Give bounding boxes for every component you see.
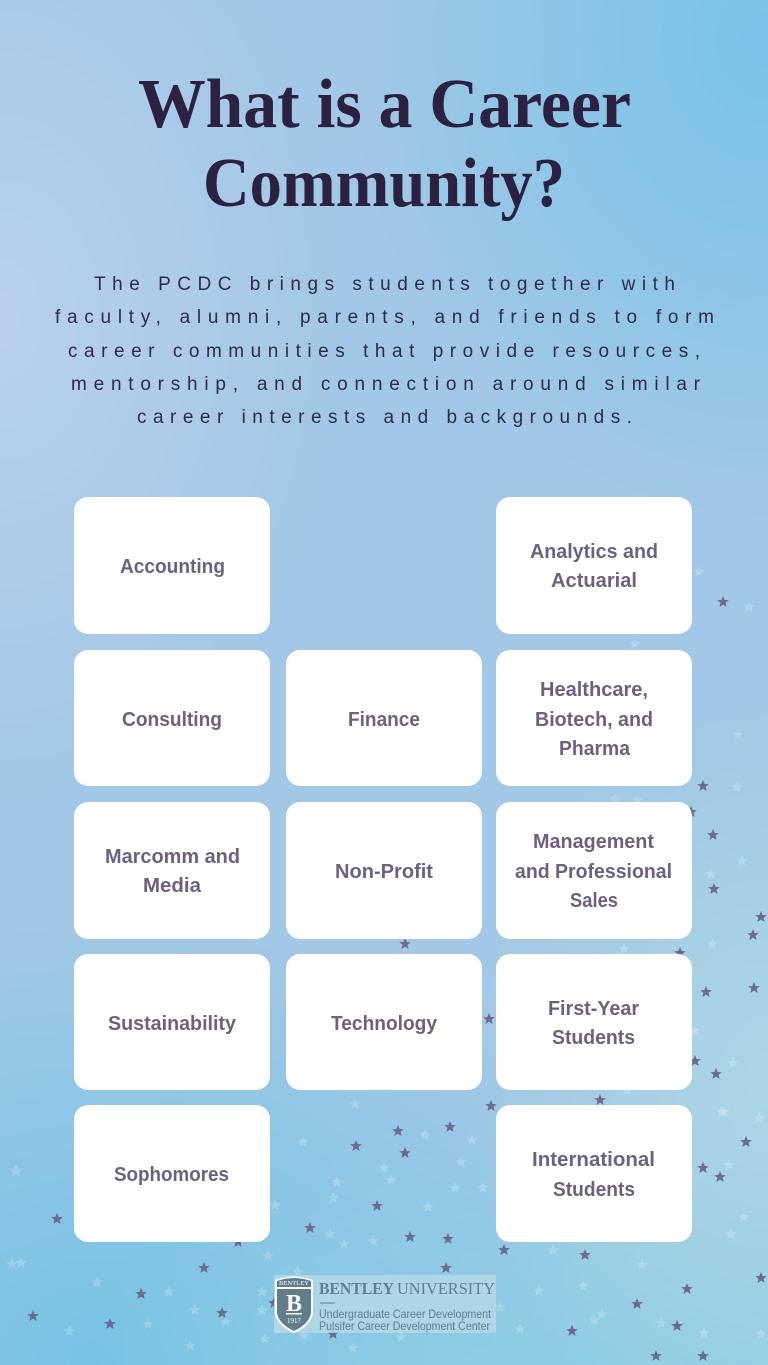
intro text block: career communities that provide resources,	[68, 341, 700, 362]
card grid	[74, 497, 692, 1242]
card: Management and Professional Sales: Management	[533, 831, 654, 853]
card: Marcomm and Media: Marcomm and	[105, 846, 240, 868]
icon: Bentley shield: B	[286, 1291, 302, 1317]
card: Management and Professional Sales	[496, 802, 692, 939]
card: Sophomores: Sophomores	[114, 1164, 229, 1186]
card: Marcomm and Media	[74, 802, 270, 939]
title: What is a Career	[138, 66, 631, 143]
card: Non-Profit: Non-Profit	[335, 861, 433, 883]
card: Sustainability: Sustainability	[108, 1013, 237, 1035]
card: International Students: Students	[553, 1179, 635, 1201]
intro text block	[55, 274, 714, 428]
card: First-Year Students: First-Year	[548, 998, 639, 1020]
card: Management and Professional Sales: and Professional	[515, 861, 672, 883]
Bentley University logo: Pulsifer Career Development Center	[319, 1319, 490, 1333]
light star field	[6, 566, 767, 1353]
Bentley University logo: UNIVERSITY	[397, 1279, 495, 1298]
card: Analytics and Actuarial: Actuarial	[551, 570, 637, 592]
card: Accounting	[74, 497, 270, 634]
card: Finance: Finance	[348, 709, 420, 731]
card: Marcomm and Media: Media	[143, 875, 202, 897]
card: First-Year Students: Students	[552, 1027, 635, 1049]
intro text block: The PCDC brings students together with	[94, 274, 675, 295]
Bentley University logo: BENTLEY	[319, 1279, 394, 1298]
Bentley University logo	[274, 1275, 496, 1333]
intro text block: faculty, alumni, parents, and friends to form	[55, 307, 714, 328]
card: First-Year Students	[496, 954, 692, 1090]
card: Consulting: Consulting	[122, 709, 222, 731]
title: Community?	[203, 145, 565, 222]
card: Analytics and Actuarial: Analytics and	[530, 541, 658, 563]
card: Non-Profit	[286, 802, 482, 939]
card: Sophomores	[74, 1105, 270, 1242]
icon: Bentley shield: BENTLEY	[279, 1280, 309, 1287]
icon: Bentley shield	[275, 1276, 313, 1333]
card: Healthcare, Biotech, and Pharma: Biotech, and	[535, 709, 653, 731]
title	[138, 66, 631, 222]
Bentley University logo: Undergraduate Career Development	[319, 1307, 492, 1321]
card: Sustainability	[74, 954, 270, 1090]
card: Analytics and Actuarial	[496, 497, 692, 634]
card: Consulting	[74, 650, 270, 786]
card: Technology	[286, 954, 482, 1090]
card: International Students: International	[532, 1149, 655, 1171]
card: Healthcare, Biotech, and Pharma	[496, 650, 692, 786]
card: Management and Professional Sales: Sales	[570, 890, 618, 912]
intro text block: career interests and backgrounds.	[137, 407, 632, 428]
card: Healthcare, Biotech, and Pharma: Pharma	[559, 738, 631, 760]
icon: Bentley shield: 1917	[287, 1317, 302, 1325]
card: Healthcare, Biotech, and Pharma: Healthcare,	[540, 679, 648, 701]
card: Finance	[286, 650, 482, 786]
card: Accounting: Accounting	[120, 556, 225, 578]
dark star field	[27, 596, 767, 1361]
card: Technology: Technology	[331, 1013, 438, 1035]
intro text block: mentorship, and connection around similar	[71, 374, 701, 395]
card: International Students	[496, 1105, 692, 1242]
